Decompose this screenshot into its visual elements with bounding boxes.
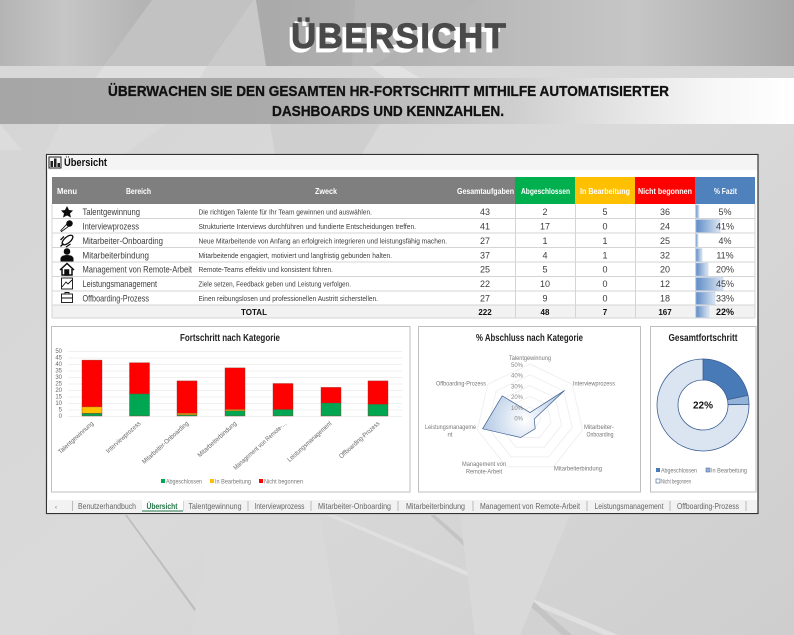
category labels: Mitarbeiterbindung bbox=[196, 420, 239, 459]
table header: Bereich bbox=[126, 187, 151, 196]
y axis bbox=[55, 349, 63, 420]
donut bbox=[657, 359, 749, 451]
category labels: Talentgewinnung bbox=[57, 420, 96, 456]
table: Bereich column bbox=[82, 207, 192, 304]
y axis: 50 bbox=[55, 349, 63, 355]
table: numbers: 20 bbox=[660, 264, 670, 274]
category labels: Management von Remote-… bbox=[232, 420, 288, 472]
sheet tabs: Benutzerhandbuch bbox=[78, 502, 136, 511]
table header: Menu bbox=[57, 187, 77, 196]
table: numbers: 0 bbox=[602, 294, 608, 304]
sheet tabs bbox=[47, 500, 757, 513]
table: numbers: 5 bbox=[542, 264, 548, 274]
radar category labels: Onboarding bbox=[586, 432, 614, 438]
table: numbers: 41 bbox=[480, 222, 490, 232]
icon: microphone bbox=[61, 221, 72, 232]
sheet tabs: Mitarbeiterbindung bbox=[406, 502, 465, 511]
table: numbers: 32 bbox=[660, 250, 670, 260]
panel: donut chart bbox=[650, 326, 756, 492]
sheet tabs: Talentgewinnung bbox=[188, 502, 242, 511]
radar category labels: Talentgewinnung bbox=[509, 356, 551, 362]
table: numbers: 33% bbox=[716, 294, 734, 304]
sheet tabs: Mitarbeiter-Onboarding bbox=[318, 502, 391, 511]
table grid bbox=[52, 204, 755, 318]
icon: home bbox=[60, 264, 74, 275]
icon: briefcase bbox=[62, 292, 72, 302]
table: numbers: 4% bbox=[718, 236, 732, 246]
donut value: 22% bbox=[693, 400, 713, 412]
table header: Zweck bbox=[315, 187, 337, 196]
chart title: Gesamtfortschritt bbox=[668, 333, 738, 344]
legend bbox=[656, 468, 747, 486]
table: numbers: 2 bbox=[542, 207, 548, 217]
icons: menu column bbox=[60, 206, 74, 302]
table header: % Fazit bbox=[714, 187, 737, 196]
subtitle bbox=[108, 83, 669, 120]
panel: spreadsheet window bbox=[46, 154, 758, 514]
table: total row: 167 bbox=[658, 308, 672, 317]
icon: rocket bbox=[60, 234, 74, 247]
icon: employee bbox=[60, 248, 74, 262]
table: Bereich column: Talentgewinnung bbox=[82, 207, 140, 217]
table: numbers: 11% bbox=[716, 250, 734, 260]
table: Zweck column: Ziele setzen, Feedback geben und Leistung verfolgen. bbox=[198, 280, 351, 288]
radar axis labels: 10% bbox=[511, 406, 524, 412]
category labels: Leistungsmanagement bbox=[286, 420, 333, 464]
table: numbers: 18 bbox=[660, 294, 670, 304]
table: numbers bbox=[480, 207, 734, 304]
y axis: 20 bbox=[55, 388, 63, 394]
sheet tabs: Interviewprozess bbox=[254, 502, 304, 511]
table: numbers: 43 bbox=[480, 207, 490, 217]
table: numbers: 22 bbox=[480, 279, 490, 289]
radar axis labels: 40% bbox=[511, 374, 524, 380]
icon: chart bbox=[62, 278, 72, 289]
title: ÜBERSICHT bbox=[291, 17, 506, 56]
legend: In Bearbeitung bbox=[711, 468, 747, 474]
category labels: Offboarding-Prozess bbox=[338, 420, 382, 460]
subtitle: ÜBERWACHEN SIE DEN GESAMTEN HR-FORTSCHRITT MITHILFE AUTOMATISIERTER bbox=[108, 83, 669, 100]
category labels bbox=[57, 420, 382, 472]
table: numbers: 4 bbox=[542, 250, 548, 260]
legend: Nicht begonnen bbox=[264, 478, 303, 486]
y axis: 25 bbox=[55, 382, 63, 388]
sheet tabs: Offboarding-Prozess bbox=[677, 502, 739, 511]
table: total row bbox=[241, 307, 734, 317]
table: numbers: 0 bbox=[602, 264, 608, 274]
sheet tabs: Übersicht bbox=[146, 502, 178, 511]
y axis: 35 bbox=[55, 368, 63, 374]
radar axis labels: 0% bbox=[514, 416, 524, 422]
table: numbers: 25 bbox=[660, 236, 670, 246]
panel: bar chart bbox=[52, 326, 410, 492]
table: numbers: 37 bbox=[480, 250, 490, 260]
panel: radar chart bbox=[418, 326, 640, 492]
y axis: 45 bbox=[55, 356, 63, 362]
table: numbers: 0 bbox=[602, 222, 608, 232]
chart title: Fortschritt nach Kategorie bbox=[180, 333, 280, 344]
y axis: 30 bbox=[55, 375, 63, 381]
radar axis labels bbox=[511, 363, 524, 422]
sheet tabs: ‹ bbox=[55, 505, 57, 511]
y axis: 0 bbox=[59, 414, 63, 420]
radar axis labels: 20% bbox=[511, 395, 524, 401]
table: numbers: 17 bbox=[540, 222, 550, 232]
radar category labels: Mitarbeiter- bbox=[584, 425, 614, 431]
table: Bereich column: Offboarding-Prozess bbox=[82, 294, 149, 304]
legend bbox=[161, 478, 303, 486]
table: numbers: 41% bbox=[716, 222, 734, 232]
y axis: 40 bbox=[55, 362, 63, 368]
radar axis labels: 30% bbox=[511, 384, 524, 390]
table: total row: TOTAL bbox=[241, 308, 267, 317]
table header: In Bearbeitung bbox=[580, 187, 630, 196]
table: Bereich column: Mitarbeiter-Onboarding bbox=[82, 236, 163, 246]
category labels: Mitarbeiter-Onboarding bbox=[141, 420, 191, 466]
table header: Nicht begonnen bbox=[638, 187, 692, 196]
sheet title bar bbox=[47, 155, 757, 170]
table: total row: 7 bbox=[603, 308, 608, 317]
radar category labels: Interviewprozess bbox=[573, 382, 615, 388]
y axis: 10 bbox=[55, 401, 63, 407]
table header: Gesamtaufgaben bbox=[457, 187, 514, 196]
table: Zweck column bbox=[198, 208, 447, 303]
table: numbers: 9 bbox=[542, 294, 548, 304]
chart title: % Abschluss nach Kategorie bbox=[476, 333, 583, 344]
radar category labels: nt bbox=[447, 432, 453, 438]
y axis: 5 bbox=[59, 408, 63, 414]
icon: bar chart bbox=[49, 157, 61, 168]
progress bars bbox=[696, 205, 723, 318]
table: numbers: 1 bbox=[602, 236, 608, 246]
table: numbers: 0 bbox=[602, 279, 608, 289]
sheet tabs: Leistungsmanagement bbox=[594, 502, 664, 511]
sheet tabs: Management von Remote-Arbeit bbox=[480, 502, 581, 511]
legend: Abgeschlossen bbox=[661, 468, 697, 474]
y axis: 15 bbox=[55, 394, 63, 400]
radar category labels bbox=[425, 356, 615, 476]
table: numbers: 27 bbox=[480, 236, 490, 246]
icon: star bbox=[61, 206, 73, 218]
sheet title: Übersicht bbox=[64, 156, 107, 169]
table: Zweck column: Neue Mitarbeitende von Anfang an erfolgreich integrieren und leistungsfähig machen. bbox=[198, 236, 447, 246]
radar category labels: Mitarbeiterbindung bbox=[554, 466, 602, 472]
table: Bereich column: Mitarbeiterbindung bbox=[82, 250, 149, 260]
radar axis labels: 50% bbox=[511, 363, 524, 369]
table: numbers: 5 bbox=[602, 207, 608, 217]
legend: Abgeschlossen bbox=[166, 478, 202, 486]
radar data bbox=[483, 390, 565, 438]
table: numbers: 36 bbox=[660, 207, 670, 217]
table: numbers: 12 bbox=[660, 279, 670, 289]
table: Bereich column: Leistungsmanagement bbox=[82, 279, 157, 289]
table: Zweck column: Einen reibungslosen und professionellen Austritt sicherstellen. bbox=[198, 294, 378, 303]
radar category labels: Leistungsmanageme bbox=[425, 425, 477, 431]
radar grid bbox=[477, 364, 583, 467]
legend: In Bearbeitung bbox=[215, 478, 251, 486]
table header bbox=[52, 177, 755, 204]
legend: Nicht begonnen bbox=[661, 478, 691, 486]
table: numbers: 1 bbox=[602, 250, 608, 260]
title: ÜBERSICHT bbox=[288, 21, 500, 60]
table: numbers: 45% bbox=[716, 279, 734, 289]
table: numbers: 10 bbox=[540, 279, 550, 289]
table header: Abgeschlossen bbox=[521, 187, 570, 196]
table: Zweck column: Die richtigen Talente für Ihr Team gewinnen und auswählen. bbox=[198, 208, 372, 216]
table: Zweck column: Strukturierte Interviews durchführen und fundierte Entscheidungen treffen. bbox=[198, 222, 416, 231]
radar category labels: Remote-Arbeit bbox=[466, 470, 502, 476]
table: numbers: 1 bbox=[542, 236, 548, 246]
table: numbers: 24 bbox=[660, 222, 670, 232]
subtitle: DASHBOARDS UND KENNZAHLEN. bbox=[272, 103, 504, 120]
table: numbers: 27 bbox=[480, 294, 490, 304]
stacked bars bbox=[82, 360, 388, 416]
table: total row: 222 bbox=[478, 308, 492, 317]
table: Zweck column: Mitarbeitende engagiert, motiviert und langfristig gebunden halten. bbox=[198, 251, 392, 260]
table: total row: 22% bbox=[716, 307, 734, 317]
radar category labels: Offboarding-Prozess bbox=[436, 382, 486, 388]
radar category labels: Management von bbox=[462, 462, 506, 468]
table: numbers: 25 bbox=[480, 264, 490, 274]
table: Bereich column: Management von Remote-Arbeit bbox=[82, 264, 192, 274]
category labels: Interviewprozess bbox=[105, 420, 143, 455]
table: Bereich column: Interviewprozess bbox=[82, 222, 139, 232]
table: Zweck column: Remote-Teams effektiv und konsistent führen. bbox=[198, 265, 333, 274]
table: numbers: 5% bbox=[718, 207, 732, 217]
table: numbers: 20% bbox=[716, 264, 734, 274]
table: total row: 48 bbox=[541, 308, 550, 317]
